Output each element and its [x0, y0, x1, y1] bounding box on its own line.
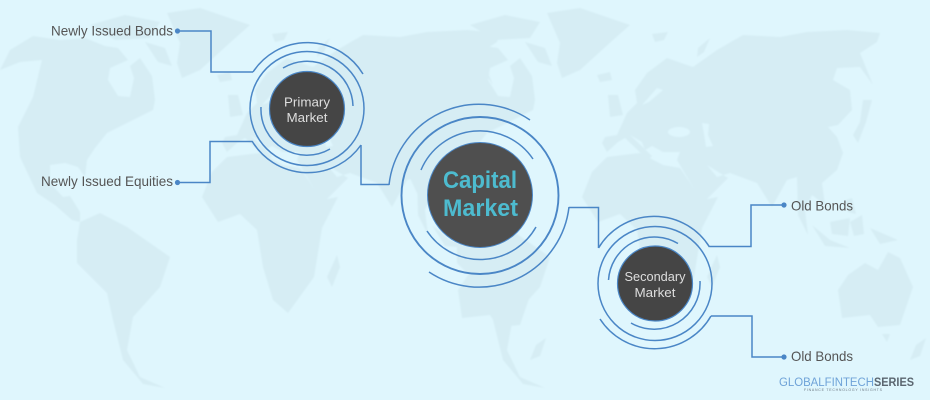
logo: Global Fintech Series: SERIES — [874, 377, 914, 389]
branch: Newly Issued Bonds — [51, 22, 253, 72]
node: Capital Market: Market — [443, 195, 518, 222]
node: Secondary Market: Secondary — [624, 269, 686, 284]
logo: Global Fintech Series: FINANCE TECHNOLOGY INSIGHTS — [804, 388, 883, 392]
connector: primary to capital — [361, 145, 389, 184]
branch: Newly Issued Equities — [41, 142, 252, 189]
branch: Old Bonds lower — [711, 316, 853, 364]
logo: Global Fintech Series: GLOBALFINTECH — [779, 377, 874, 389]
connector: capital to secondary — [569, 208, 598, 248]
branch: Old Bonds lower: Old Bonds — [791, 348, 853, 364]
branch: Newly Issued Equities: Newly Issued Equities — [41, 173, 173, 189]
node: Primary Market: Market — [286, 110, 328, 125]
node: Secondary Market: Market — [634, 285, 676, 300]
node: Secondary Market — [598, 216, 712, 349]
branch: Newly Issued Bonds: Newly Issued Bonds — [51, 22, 173, 38]
node: Capital Market — [389, 104, 569, 287]
branch: Old Bonds upper: Old Bonds — [791, 198, 853, 214]
node: Capital Market: Capital — [443, 167, 517, 194]
node: Primary Market: Primary — [284, 94, 331, 110]
branch: Old Bonds upper — [710, 198, 853, 246]
logo: Global Fintech Series — [779, 377, 914, 392]
node: Primary Market — [250, 43, 364, 173]
